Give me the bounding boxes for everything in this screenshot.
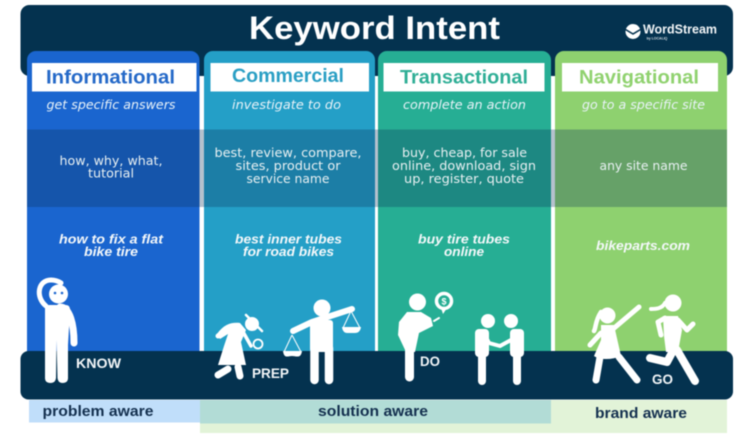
commercial subtitle: investigate to do xyxy=(232,97,341,112)
example: commercial: for road bikes xyxy=(243,244,334,259)
awareness band: problem aware: problem aware xyxy=(42,403,154,420)
icon: running woman xyxy=(650,294,695,381)
keywords: informational: how, why, what, xyxy=(60,153,162,168)
keywords: transactional: up, register, quote xyxy=(404,171,524,186)
commercial heading xyxy=(210,63,369,92)
icon: thinking person xyxy=(39,280,74,383)
logo: WordStream: WordStream xyxy=(643,22,717,36)
example: transactional: online xyxy=(444,244,484,259)
icon: person with phone: $ xyxy=(441,296,447,306)
commercial heading: Commercial xyxy=(232,65,344,87)
label: do: DO xyxy=(420,353,440,369)
keyword band xyxy=(27,130,727,207)
panel: commercial xyxy=(204,51,375,352)
awareness band: solution aware xyxy=(200,400,551,424)
navigational subtitle: go to a specific site xyxy=(582,97,705,112)
navigational heading xyxy=(562,63,718,92)
informational heading xyxy=(32,63,196,92)
transactional subtitle: complete an action xyxy=(403,97,526,112)
example: commercial xyxy=(235,232,342,259)
navigational heading: Navigational xyxy=(579,66,699,88)
awareness band: problem aware xyxy=(29,400,200,422)
informational subtitle: get specific answers xyxy=(46,97,176,112)
example: informational: how to fix a flat xyxy=(59,232,164,246)
example: transactional xyxy=(418,232,510,259)
keywords: informational xyxy=(60,153,162,180)
icon: person with phone xyxy=(398,294,452,377)
keywords: transactional xyxy=(392,145,536,186)
icon: person with scales xyxy=(283,300,361,380)
panel: transactional xyxy=(378,51,551,352)
icon: handshake xyxy=(475,314,524,381)
panel: informational xyxy=(27,51,200,352)
awareness band: solution aware: solution aware xyxy=(318,403,428,420)
example: transactional: buy tire tubes xyxy=(418,232,510,246)
keywords: navigational: any site name xyxy=(600,158,688,173)
informational heading: Informational xyxy=(46,66,175,88)
label: go: GO xyxy=(652,371,673,387)
label: prep: PREP xyxy=(252,365,289,381)
example: commercial: best inner tubes xyxy=(235,232,342,246)
bottom bar xyxy=(20,351,733,400)
awareness band: brand aware background xyxy=(200,400,727,433)
keywords: informational: tutorial xyxy=(88,166,134,180)
transactional heading: Transactional xyxy=(400,66,528,88)
keywords: transactional: buy, cheap, for sale xyxy=(402,145,527,160)
keywords: commercial: service name xyxy=(246,171,330,186)
icon: pointing woman xyxy=(590,307,639,380)
transactional heading xyxy=(384,63,544,92)
header banner xyxy=(20,5,733,76)
example: informational: bike tire xyxy=(84,244,138,259)
example: informational xyxy=(59,232,164,259)
panel: navigational xyxy=(555,51,727,352)
label: know: KNOW xyxy=(76,355,122,371)
example: navigational: bikeparts.com xyxy=(596,238,690,253)
keywords: commercial xyxy=(214,145,362,186)
logo: WordStream: by LOCALIQ xyxy=(647,36,668,40)
awareness label: brand aware: brand aware xyxy=(595,405,687,422)
title: Keyword Intent xyxy=(249,10,500,46)
keywords: commercial: sites, product or xyxy=(236,158,341,173)
icon: detective with magnifier xyxy=(217,315,262,376)
keywords: commercial: best, review, compare, xyxy=(214,145,362,160)
logo: WordStream xyxy=(626,22,717,40)
keywords: transactional: online, download, sign xyxy=(392,158,536,173)
